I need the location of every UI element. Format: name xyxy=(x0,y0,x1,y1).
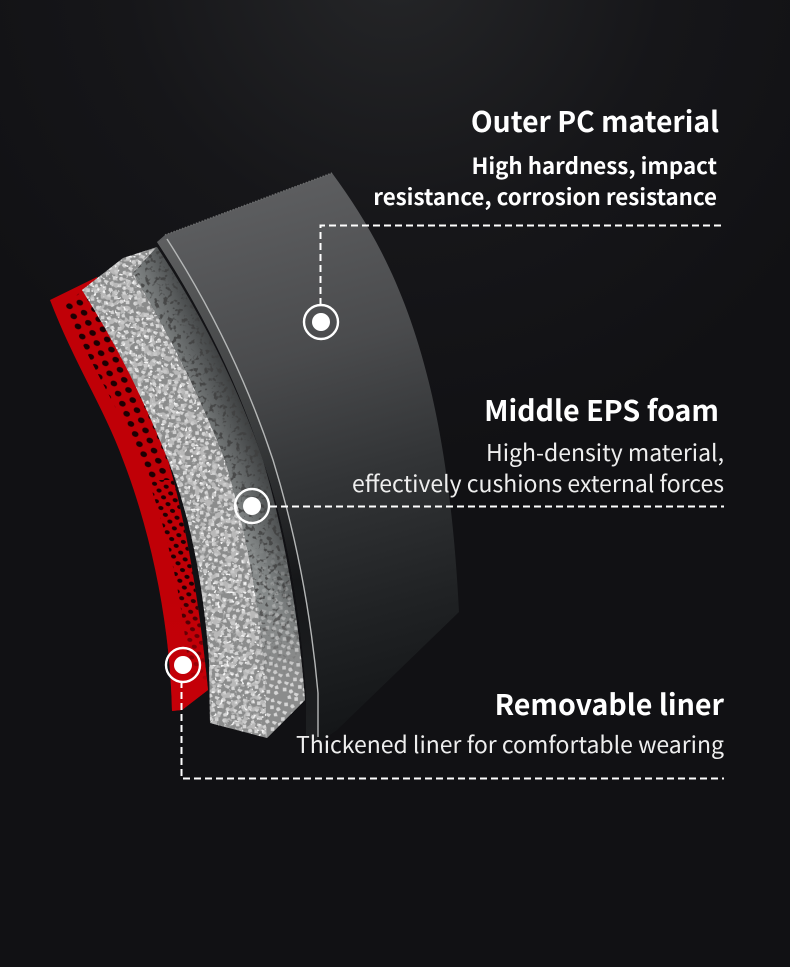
leader line: EPS foam xyxy=(270,506,724,508)
text: outer PC description: resistance, corrosion resistance xyxy=(373,180,717,212)
heading: middle EPS foam: Middle EPS foam xyxy=(484,389,719,430)
layer: red removable liner xyxy=(50,277,208,711)
leader line: outer PC xyxy=(320,226,721,306)
layer: EPS foam xyxy=(82,247,267,738)
heading: outer PC material: Outer PC material xyxy=(471,100,719,141)
leader line: liner xyxy=(182,681,724,778)
marker: liner xyxy=(166,648,200,682)
text: EPS description: effectively cushions external forces xyxy=(352,465,724,499)
text: EPS description: High-density material, xyxy=(486,434,724,468)
layer: outer shell xyxy=(157,173,459,743)
helmet layers illustration xyxy=(40,173,459,745)
callout: middle EPS foam xyxy=(235,389,724,523)
text: outer PC description: High hardness, impact xyxy=(471,149,717,181)
layer: foam inner face xyxy=(133,247,305,738)
text: liner description: Thickened liner for comfortable wearing xyxy=(296,726,724,760)
heading: removable liner: Removable liner xyxy=(495,683,725,724)
marker: outer PC xyxy=(304,305,338,339)
callout: outer PC material xyxy=(304,100,721,339)
marker: EPS foam xyxy=(235,489,269,523)
callout: removable liner xyxy=(166,648,725,778)
